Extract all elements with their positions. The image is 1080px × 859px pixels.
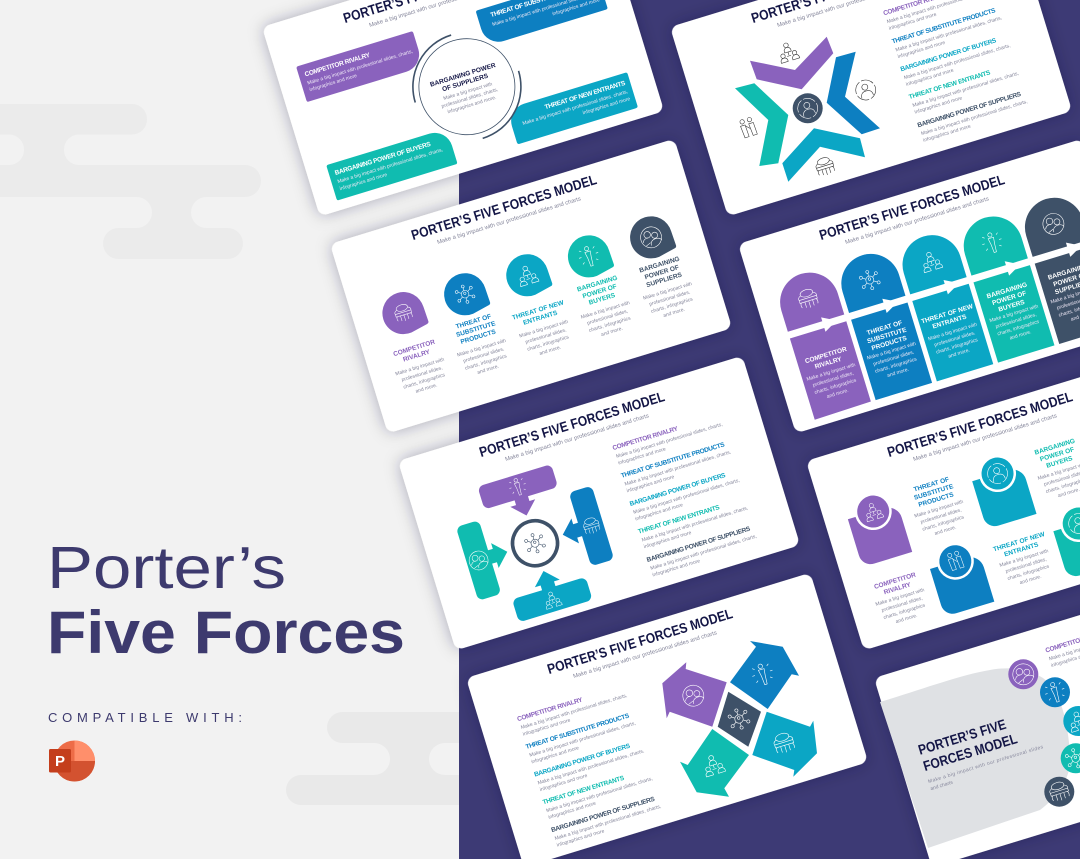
column: threat of new entrants: ENTRANTS	[522, 310, 559, 327]
text list: five forces: Make a big impact with professional slides, charts,	[529, 721, 637, 759]
panel: slide 2, star layout	[670, 0, 1072, 216]
column: bargaining power of buyers: BARGAINING	[986, 281, 1028, 300]
column: threat of substitute products: PRODUCTS	[460, 328, 497, 346]
column: bargaining power of suppliers: charts, infographics	[650, 296, 694, 315]
column: bargaining power of buyers: POWER OF	[991, 290, 1027, 307]
column: bargaining power of buyers: professional slides,	[995, 312, 1037, 330]
text list: five forces: Make a big impact with professional slides, charts,	[554, 804, 662, 842]
column: competitor rivalry: and more.	[826, 388, 849, 400]
column: bargaining power of buyers: POWER OF	[582, 283, 618, 300]
text list: five forces: THREAT OF NEW ENTRANTS	[542, 775, 626, 806]
text list: five forces: Make a big impact with professional slides, charts,	[650, 534, 758, 572]
text list: five forces: BARGAINING POWER OF BUYERS	[533, 742, 632, 779]
text: threat of substitute products: professional slides,	[920, 507, 962, 526]
column: bargaining power of suppliers: and more.	[663, 307, 686, 319]
icon: head network	[814, 156, 836, 177]
column: threat of new entrants: professional slides,	[525, 327, 567, 345]
column: threat of substitute products: THREAT OF	[455, 313, 492, 331]
text: threat of new entrants: THREAT OF NEW	[992, 531, 1047, 553]
text list: five forces	[516, 684, 664, 849]
box: threat of new entrants: infographics and more	[582, 96, 631, 116]
column: competitor rivalry: Make a big impact with	[806, 362, 857, 383]
text: threat of new entrants	[992, 531, 1058, 591]
column: competitor rivalry: charts, infographics	[403, 372, 446, 391]
column: threat of substitute products: and more.	[477, 364, 500, 376]
column: competitor rivalry: Make a big impact with	[395, 357, 445, 377]
text list: five forces: BARGAINING POWER OF BUYERS	[900, 37, 998, 73]
cloud decoration: upper left	[0, 104, 331, 259]
text: threat of new entrants: ENTRANTS	[1003, 541, 1040, 558]
heading: Porter's Five Forces Model: PORTER’S FIVE	[916, 716, 1008, 758]
panel: slide 6, rounded badges	[806, 356, 1080, 650]
arrow: right blue	[552, 486, 614, 572]
box: threat of new entrants: THREAT OF NEW ENTRANTS	[544, 80, 627, 111]
column: bargaining power of buyers: charts, infographics	[997, 319, 1040, 337]
text: threat of substitute products: charts, infographics	[922, 514, 965, 533]
column: competitor rivalry: RIVALRY	[814, 356, 843, 371]
text list: five forces: Make a big impact with professional slides, charts,	[920, 99, 1028, 137]
column: threat of substitute products	[435, 267, 514, 380]
panel: slide 1, circle layout	[262, 0, 664, 216]
text list: five forces: BARGAINING POWER OF SUPPLIERS	[917, 91, 1023, 129]
shape: grey blob	[880, 668, 1070, 848]
panel: slide 7, diverging arrows	[466, 573, 868, 859]
column: competitor rivalry	[773, 265, 871, 420]
circle: bargaining power of suppliers: professional slides, charts,	[441, 87, 499, 110]
column: bargaining power of suppliers: BARGAINING	[639, 256, 681, 275]
box: competitor rivalry	[296, 31, 424, 102]
box: bargaining power of buyers: Make a big impact with professional slides, charts,	[337, 147, 444, 185]
text: bargaining power of buyers: BUYERS	[1046, 455, 1074, 470]
text: threat of new entrants: and more.	[1019, 574, 1042, 586]
text list: five forces: infographics and more	[905, 68, 955, 88]
column: competitor rivalry: RIVALRY	[402, 348, 432, 364]
box: threat of substitute products	[476, 0, 608, 46]
circle: center network	[507, 515, 563, 571]
text: competitor rivalry: RIVALRY	[883, 581, 912, 596]
column: bargaining power of suppliers: Make a big impact with	[642, 281, 693, 302]
heading: Porter's Five Forces Model: and charts	[930, 779, 954, 792]
text list: five forces: THREAT OF NEW ENTRANTS	[908, 69, 992, 101]
column: threat of new entrants: and more.	[948, 347, 971, 360]
text list: five forces: Make a big impact with professional slides, charts,	[520, 693, 628, 731]
column: threat of new entrants	[495, 247, 578, 361]
icon: PowerPoint logo: P	[55, 753, 65, 770]
panel: slide 4, arch layout	[738, 139, 1080, 433]
column: bargaining power of buyers: BARGAINING	[576, 275, 618, 294]
text: competitor rivalry: professional slides,	[881, 596, 923, 614]
title: Porter's Five Forces	[47, 535, 405, 666]
column: bargaining power of buyers: and more.	[1009, 329, 1032, 342]
box: competitor rivalry: infographics and more	[309, 73, 358, 93]
text list: five forces: infographics and more	[556, 828, 605, 849]
text list: five forces: THREAT OF SUBSTITUTE PRODUCTS	[891, 7, 997, 46]
column: competitor rivalry: and more.	[415, 382, 438, 395]
text list: five forces: infographics and more	[531, 745, 580, 765]
text list: five forces: infographics and more	[618, 446, 667, 467]
text: competitor rivalry: charts, infographics	[883, 602, 926, 621]
panel: slide 5, converging arrows: Make a big impact with our professional slides and charts	[505, 413, 650, 463]
text: competitor rivalry: COMPETITOR	[873, 571, 917, 591]
badge: teal person	[1048, 498, 1080, 579]
column: threat of substitute products: Make a big impact with	[456, 338, 507, 359]
text list: five forces: Make a big impact with professional slides, charts,	[641, 505, 749, 544]
text: threat of substitute products: Make a big impact with	[914, 499, 964, 520]
column: bargaining power of suppliers: POWER OF	[644, 264, 680, 281]
panel: slide 3, pin layout: PORTER’S FIVE FORCES MODEL	[409, 171, 599, 243]
panel: slide 7, diverging arrows: PORTER’S FIVE FORCES MODEL	[545, 605, 735, 677]
box: bargaining power of buyers	[326, 128, 458, 201]
column: threat of new entrants: charts, infographics	[527, 334, 570, 353]
column: threat of new entrants: and more.	[539, 345, 562, 357]
text: bargaining power of buyers: and more.	[1057, 487, 1080, 499]
title: Porter's Five Forces: Porter’s	[47, 535, 286, 601]
column: threat of new entrants: THREAT OF NEW	[511, 299, 566, 322]
column: competitor rivalry: professional slides,	[812, 370, 855, 389]
column: competitor rivalry: charts, infographics	[814, 377, 858, 396]
panel: slide 5, converging arrows	[398, 356, 800, 650]
text: threat of substitute products: PRODUCTS	[918, 491, 955, 509]
text list: five forces	[612, 413, 760, 579]
chart: five point star of chevrons	[735, 37, 880, 182]
text list: five forces: THREAT OF NEW ENTRANTS	[637, 504, 721, 536]
text list: five forces: infographics and more	[539, 773, 588, 793]
column: threat of new entrants	[895, 228, 993, 381]
box: threat of new entrants	[507, 72, 638, 144]
text list: five forces: infographics and more	[914, 95, 963, 116]
text list: five forces: BARGAINING POWER OF SUPPLIERS	[550, 796, 656, 834]
text: competitor rivalry: Make a big impact with	[875, 587, 925, 608]
box: competitor rivalry: COMPETITOR RIVALRY	[304, 52, 372, 78]
text: competitor rivalry heading	[1045, 615, 1080, 669]
text list: five forces: infographics and more	[522, 717, 571, 738]
icon circles: five forces	[1008, 659, 1080, 807]
panel: slide 6, rounded badges: Make a big impact with our professional slides and charts	[913, 413, 1058, 463]
box: competitor rivalry: Make a big impact with professional slides, charts,	[307, 49, 414, 87]
text: threat of substitute products: THREAT OF	[913, 476, 950, 494]
column: threat of substitute products: charts, infographics	[874, 356, 918, 375]
text list: five forces: infographics and more	[922, 124, 972, 144]
text list: five forces: Make a big impact with professional slides, charts,	[633, 478, 740, 516]
text list: five forces: Make a big impact with professional slides, charts,	[615, 422, 723, 460]
compatible with label: COMPATIBLE WITH:	[48, 710, 242, 725]
circle: bargaining power of suppliers	[399, 19, 534, 154]
column: bargaining power of buyers: Make a big impact with	[580, 300, 631, 321]
box: bargaining power of buyers: infographics and more	[339, 172, 388, 192]
arrow: left teal	[456, 515, 519, 601]
text list: five forces: infographics and more	[643, 530, 692, 550]
text: bargaining power of buyers: POWER OF	[1039, 446, 1075, 463]
column: threat of new entrants: Make a big impact with	[519, 319, 569, 340]
column: competitor rivalry	[373, 285, 452, 399]
circle: bargaining power of suppliers: OF SUPPLIERS	[441, 73, 490, 93]
text: threat of new entrants: charts, infographics	[1007, 564, 1051, 582]
column: threat of new entrants: professional slides,	[934, 330, 976, 348]
column: bargaining power of buyers: BUYERS	[998, 299, 1026, 314]
column: threat of substitute products: SUBSTITUTE	[866, 326, 908, 345]
text list: five forces: Make a big impact with professional slides, charts,	[903, 43, 1011, 81]
chart: pinwheel of arrows	[662, 641, 817, 797]
text: bargaining power of buyers: BARGAINING	[1034, 438, 1076, 457]
panel: slide 8, title with circles	[874, 573, 1080, 859]
text list: five forces: Make a big impact with professional slides, charts,	[546, 776, 654, 814]
circle: bargaining power of suppliers: BARGAINING POWER	[429, 62, 497, 89]
title: Porter's Five Forces: Five Forces	[47, 599, 405, 666]
panel: slide 3, pin layout	[330, 139, 732, 433]
column: bargaining power of suppliers: SUPPLIERS	[646, 271, 684, 289]
text: threat of new entrants: Make a big impact with	[999, 548, 1049, 569]
column: bargaining power of buyers	[956, 209, 1054, 363]
column: bargaining power of buyers: BUYERS	[588, 292, 617, 307]
text list: five forces: BARGAINING POWER OF SUPPLIERS	[646, 525, 752, 564]
heading: Porter's Five Forces Model: Make a big impact with our professional slides	[927, 744, 1044, 785]
text list: five forces: Make a big impact with professional slides, charts,	[537, 748, 645, 786]
column: threat of new entrants: ENTRANTS	[932, 313, 968, 331]
circle: bargaining power of suppliers: Make a big impact with	[443, 81, 493, 102]
box: bargaining power of buyers: BARGAINING POWER OF BUYERS	[334, 141, 432, 177]
panel: slide 4, arch layout: PORTER’S FIVE FORCES MODEL	[817, 171, 1007, 243]
panel: slide 7, diverging arrows: Make a big impact with our professional slides and charts	[573, 630, 718, 680]
text: bargaining power of buyers	[1029, 436, 1080, 503]
text list: five forces: BARGAINING POWER OF BUYERS	[629, 472, 727, 508]
column: bargaining power of suppliers	[621, 210, 700, 323]
column: competitor rivalry: COMPETITOR	[393, 339, 436, 358]
arrow: bottom cyan	[507, 560, 593, 622]
box: threat of new entrants: Make a big impact with professional slides, charts,	[522, 89, 629, 127]
column: bargaining power of buyers: Make a big impact with	[989, 303, 1039, 324]
text list: five forces: Make a big impact with professional slides, charts,	[624, 449, 732, 488]
cloud decoration: lower middle	[260, 712, 519, 805]
column: threat of substitute products	[834, 247, 932, 400]
icon: person in circle	[853, 78, 878, 102]
column: bargaining power of buyers: professional slides,	[586, 308, 629, 327]
text list: five forces: THREAT OF SUBSTITUTE PRODUCTS	[525, 712, 631, 751]
text list: five forces: Make a big impact with professional slides, charts,	[912, 71, 1020, 109]
text: threat of substitute products	[906, 474, 971, 541]
heading: Porter's Five Forces Model: FORCES MODEL	[921, 730, 1019, 774]
column: competitor rivalry: professional slides,	[401, 365, 443, 383]
panel: slide 4, arch layout: Make a big impact with our professional slides and charts	[845, 196, 990, 246]
badge: purple team	[842, 486, 912, 567]
text: competitor rivalry: and more.	[895, 613, 918, 625]
column: bargaining power of buyers	[558, 229, 637, 342]
text list: five forces: THREAT OF SUBSTITUTE PRODUCTS	[620, 441, 726, 480]
background: indigo right side	[459, 0, 1080, 859]
icon: team	[776, 40, 800, 63]
column: threat of substitute products: charts, infographics	[464, 353, 508, 372]
text list: five forces: infographics and more	[635, 502, 684, 522]
text list: five forces: infographics and more	[897, 40, 946, 60]
text list: five forces: COMPETITOR RIVALRY	[516, 696, 584, 723]
column: threat of substitute products: and more.	[887, 367, 910, 379]
column: threat of substitute products: Make a big impact with	[866, 341, 917, 362]
arrow: top purple	[477, 464, 563, 527]
column: bargaining power of suppliers	[1018, 190, 1080, 344]
text list: five forces: infographics and more	[548, 801, 597, 821]
column: competitor rivalry: COMPETITOR	[804, 346, 848, 365]
column: bargaining power of suppliers: professional slides,	[649, 289, 691, 308]
badge: blue pair	[925, 536, 994, 617]
text list: five forces: infographics and more	[888, 12, 938, 32]
panel: slide 3, pin layout: Make a big impact with our professional slides and charts	[437, 196, 582, 246]
heading: Porter's Five Forces Model	[916, 707, 1047, 792]
text list: five forces: infographics and more	[652, 558, 701, 578]
column: threat of substitute products: professional slides,	[873, 349, 915, 368]
column: threat of new entrants: THREAT OF NEW	[921, 303, 975, 326]
circle: bargaining power of suppliers: infographics and more.	[447, 95, 497, 115]
column: threat of substitute products: THREAT OF	[866, 320, 903, 337]
text list: five forces: Make a big impact with professional slides, charts,	[895, 15, 1003, 53]
panel: slide 5, converging arrows: PORTER’S FIVE FORCES MODEL	[477, 388, 667, 460]
column: threat of substitute products: PRODUCTS	[871, 335, 908, 352]
text list: five forces: infographics and more	[626, 474, 675, 494]
text list: five forces	[883, 0, 1030, 144]
column: threat of new entrants: charts, infographics	[935, 337, 979, 356]
text: threat of substitute products: SUBSTITUTE	[913, 483, 955, 502]
icon: PowerPoint logo	[49, 740, 95, 782]
column: bargaining power of buyers: charts, infographics	[588, 315, 632, 334]
text: threat of substitute products: and more.	[934, 525, 957, 537]
text list: five forces: COMPETITOR RIVALRY	[612, 425, 679, 452]
text: threat of new entrants: professional slides,	[1005, 557, 1047, 575]
column: threat of substitute products: professional slides,	[463, 346, 505, 364]
badge: cyan person	[967, 448, 1037, 529]
text: competitor rivalry	[870, 570, 932, 629]
column: bargaining power of buyers: and more.	[600, 326, 624, 338]
icon: two people	[739, 117, 757, 138]
column: threat of new entrants: Make a big impact with	[927, 322, 978, 342]
column: threat of substitute products: SUBSTITUTE	[455, 320, 497, 339]
